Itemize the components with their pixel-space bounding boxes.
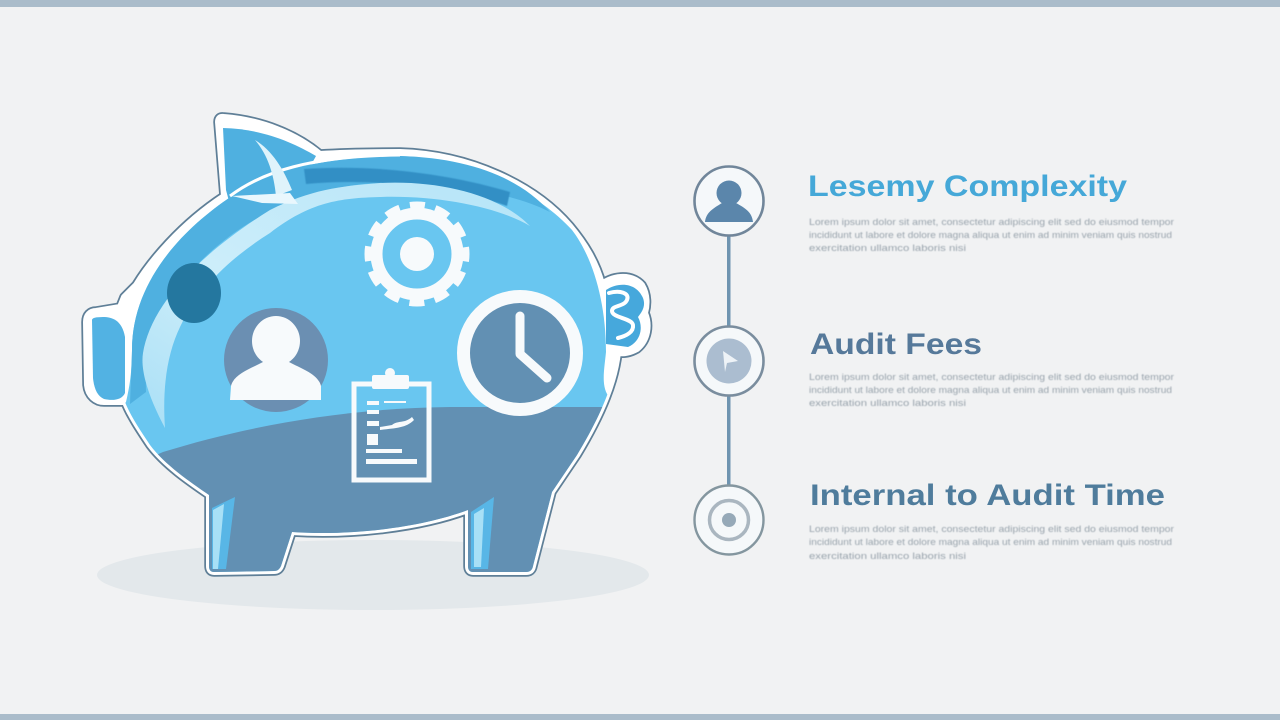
timeline connector 1: [727, 236, 730, 326]
icon: ear interior: [223, 128, 316, 205]
body text: [809, 524, 1174, 562]
body text: incididunt ut labore et dolore magna aliqua ut enim ad minim veniam quis nostrud: [809, 537, 1172, 548]
body text: exercitation ullamco laboris nisi: [809, 398, 966, 409]
body text: exercitation ullamco laboris nisi: [809, 243, 966, 254]
icon: gear: [368, 205, 466, 303]
heading: Internal to Audit Time: [810, 479, 1165, 512]
leg highlight right: [471, 497, 494, 569]
body text: [809, 217, 1174, 254]
leg highlight left: [212, 497, 235, 569]
icon: person node: [694, 166, 764, 236]
ground shadow: [97, 540, 649, 610]
item 1: Lesemy Complexity: [694, 166, 1174, 254]
icon: clipboard: [354, 368, 429, 480]
body text: Lorem ipsum dolor sit amet, consectetur adipiscing elit sed do eiusmod tempor: [809, 372, 1174, 383]
heading: Lesemy Complexity: [808, 170, 1127, 203]
icon: clock: [464, 296, 576, 410]
body text: incididunt ut labore et dolore magna aliqua ut enim ad minim veniam quis nostrud: [809, 385, 1172, 396]
body text: Lorem ipsum dolor sit amet, consectetur adipiscing elit sed do eiusmod tempor: [809, 524, 1174, 535]
heading: Audit Fees: [810, 328, 982, 361]
icon: target node: [694, 486, 764, 554]
body text: incididunt ut labore et dolore magna aliqua ut enim ad minim veniam quis nostrud: [809, 230, 1172, 241]
icon: snout interior: [92, 317, 125, 400]
timeline connector 2: [727, 396, 730, 486]
pig interior: [92, 128, 644, 590]
icon: person: [224, 308, 328, 412]
top band: [0, 0, 1280, 7]
ear glare: [255, 140, 292, 196]
pig silhouette outline: [86, 117, 648, 572]
white glare streak: [232, 193, 298, 204]
body text: [809, 372, 1174, 409]
coin slot: [304, 168, 510, 206]
item 2: Audit Fees: [694, 326, 1174, 409]
item 3: Internal to Audit Time: [694, 479, 1174, 562]
body text: exercitation ullamco laboris nisi: [809, 551, 966, 562]
icon: tail interior: [606, 285, 644, 347]
piggy bank illustration: [86, 117, 648, 590]
bottom band: [0, 714, 1280, 720]
glass rim band: [130, 156, 550, 404]
body fill: [110, 156, 620, 590]
body text: Lorem ipsum dolor sit amet, consectetur adipiscing elit sed do eiusmod tempor: [809, 217, 1174, 228]
icon: dark eye: [167, 263, 221, 323]
top edge highlight: [230, 155, 400, 196]
highlight arc: [142, 183, 530, 428]
water fill: [158, 407, 602, 572]
icon: play node: [694, 326, 764, 396]
